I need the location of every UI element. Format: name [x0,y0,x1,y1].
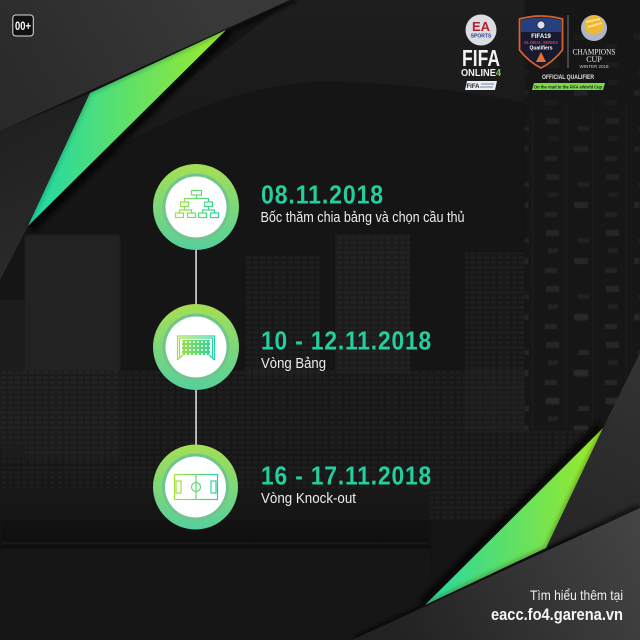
panel: right grey wedge [546,353,640,548]
footer call to action: Tìm hiểu thêm tại [530,587,623,603]
step 3 [153,444,432,530]
description: Vòng Knock-out [261,491,356,507]
age rating badge [13,15,33,36]
date: 08.11.2018 [261,180,384,210]
step 2 [153,304,432,390]
timeline connector [195,248,197,446]
logo: FIFA Online 4: ONLINE4 [461,67,501,79]
logo: FIFA19 Global Series Qualifiers shield [520,16,562,68]
official qualifier label: OFFICIAL QUALIFIER [542,74,594,81]
footer call to action: eacc.fo4.garena.vn [491,605,623,624]
date: 10 - 12.11.2018 [261,326,432,356]
shape: bottom-right green wedge [422,425,603,605]
logo: FIFA Online 4: FIFA [462,45,500,71]
description: Vòng Bảng [261,356,326,372]
logo: FIFA19 Global Series Qualifiers shield: GLOBAL SERIES [524,40,558,45]
logo: Champions Cup: CUP [586,55,602,64]
icon: bracket draw [153,164,239,250]
logo: Champions Cup: WINTER 2018 [579,64,609,69]
logo: FIFA19 Global Series Qualifiers shield: Qualifiers [529,46,553,52]
icon: pitch [153,444,238,530]
divider [568,15,569,68]
logo: FIFA19 Global Series Qualifiers shield: FIFA19 [531,34,551,40]
panel: bottom-right dark band [352,506,640,640]
footer call to action [491,587,623,624]
shape: top-left green wedge [28,30,229,229]
logo: FIFA Online 4: FIFA [466,84,480,90]
step 1 [153,164,464,250]
description: Bốc thăm chia bảng và chọn cầu thủ [260,210,464,226]
logo: Champions Cup: CHAMPIONS [572,46,616,56]
road to world cup bar: On the road to the FIFA eWorld Cup [534,84,602,90]
logo: FIFA Online 4 [461,14,501,90]
road to world cup bar [532,83,605,90]
panel: left grey wedge [0,93,90,280]
logo: FIFA Online 4: SPORTS [471,34,492,40]
icon: goal [153,304,239,390]
logo: FIFA Online 4: EA [472,19,491,34]
date: 16 - 17.11.2018 [261,460,432,490]
panel: top-left dark band [0,0,296,133]
logo: Champions Cup [572,15,616,69]
age rating badge: 00+ [15,19,31,33]
